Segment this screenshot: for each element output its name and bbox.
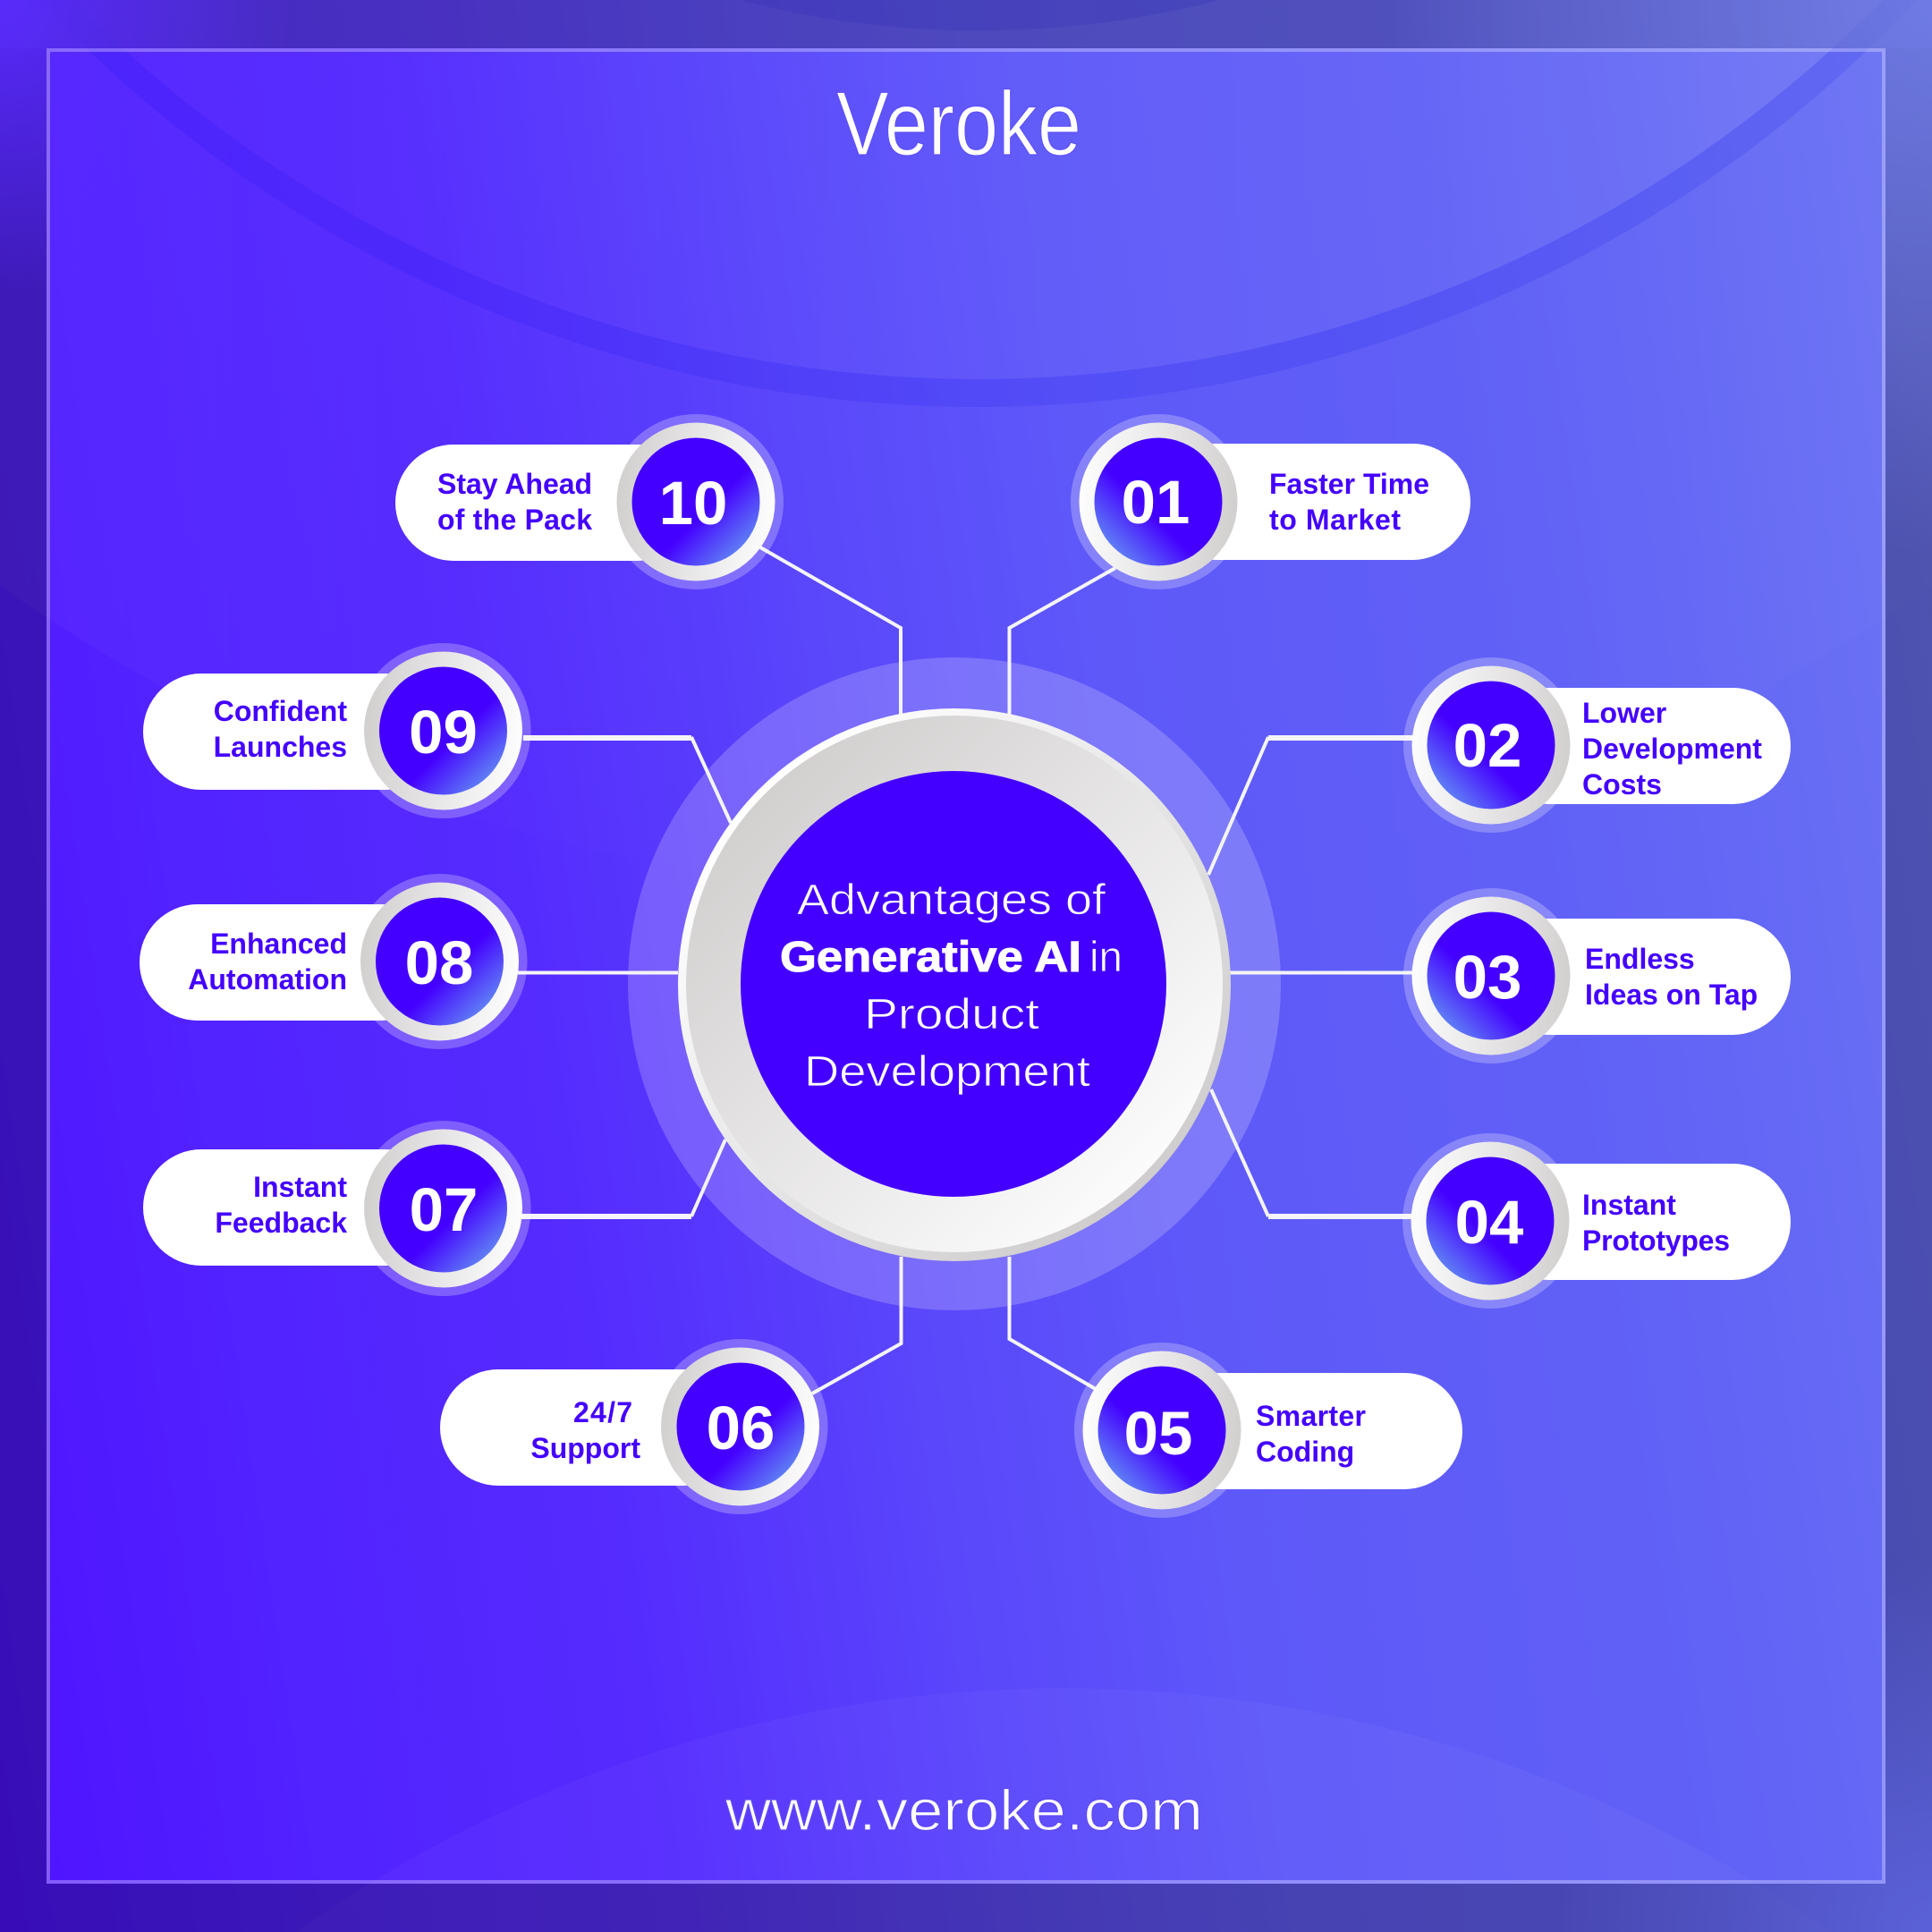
item 06: 24/7 Support: 06 [707, 1394, 775, 1462]
item 08: Enhanced Automation: Automation [188, 963, 347, 996]
item 02: Lower Development Costs [1403, 657, 1791, 833]
item 06: 24/7 Support: Support [530, 1432, 640, 1464]
item 10: Stay Ahead of the Pack: of the Pack [437, 504, 592, 536]
item 05: Smarter Coding: 05 [1124, 1399, 1192, 1468]
item 03: Endless Ideas on Tap: 03 [1453, 943, 1521, 1012]
item 03: Endless Ideas on Tap: Endless [1585, 943, 1695, 975]
item 08: Enhanced Automation [140, 874, 528, 1049]
item 02: Lower Development Costs: Costs [1582, 768, 1662, 801]
item 07: Instant Feedback [143, 1121, 531, 1296]
item 07: Instant Feedback: 07 [410, 1175, 478, 1244]
item 03: Endless Ideas on Tap: Ideas on Tap [1585, 979, 1758, 1011]
central title [780, 877, 1123, 1096]
item 06: 24/7 Support: 24/7 [573, 1396, 632, 1428]
item 04: Instant Prototypes: 04 [1455, 1188, 1523, 1257]
item 10: Stay Ahead of the Pack: 10 [659, 469, 727, 538]
item 07: Instant Feedback: Feedback [215, 1207, 347, 1239]
central title: Advantages of [797, 877, 1106, 924]
central halo [628, 657, 1281, 1310]
central title: Product [864, 991, 1039, 1038]
item 02: Lower Development Costs: Lower [1582, 697, 1666, 729]
item 04: Instant Prototypes [1402, 1133, 1791, 1309]
item 09: Confident Launches: Confident [214, 695, 347, 727]
item 02: Lower Development Costs: Development [1582, 733, 1762, 765]
website url: www.veroke.com [724, 1778, 1203, 1843]
central title: Development [804, 1048, 1090, 1096]
item 09: Confident Launches: Launches [214, 731, 347, 763]
item 07: Instant Feedback: Instant [253, 1171, 347, 1203]
logo: Veroke: Veroke [836, 74, 1081, 174]
item 08: Enhanced Automation: Enhanced [210, 928, 347, 960]
item 10: Stay Ahead of the Pack: Stay Ahead [437, 468, 592, 500]
item 10: Stay Ahead of the Pack [395, 414, 784, 589]
item 09: Confident Launches: 09 [409, 698, 478, 767]
item 01: Faster Time to Market: 01 [1122, 468, 1190, 537]
item 09: Confident Launches [143, 643, 531, 818]
item 01: Faster Time to Market: Faster Time [1269, 468, 1429, 500]
item 01: Faster Time to Market [1071, 414, 1470, 589]
central title: in [1089, 934, 1123, 981]
central circle [678, 708, 1231, 1261]
connector lines [518, 547, 1413, 1394]
central title: Generative AI [780, 934, 1081, 981]
item 05: Smarter Coding: Smarter [1256, 1400, 1366, 1432]
item 04: Instant Prototypes: Instant [1582, 1189, 1676, 1221]
item 03: Endless Ideas on Tap [1403, 888, 1791, 1063]
item 04: Instant Prototypes: Prototypes [1582, 1224, 1730, 1257]
item 06: 24/7 Support [440, 1339, 828, 1514]
item 02: Lower Development Costs: 02 [1453, 711, 1521, 780]
item 05: Smarter Coding [1074, 1343, 1462, 1518]
item 05: Smarter Coding: Coding [1256, 1436, 1354, 1468]
item 01: Faster Time to Market: to Market [1269, 504, 1401, 536]
item 08: Enhanced Automation: 08 [405, 928, 473, 997]
